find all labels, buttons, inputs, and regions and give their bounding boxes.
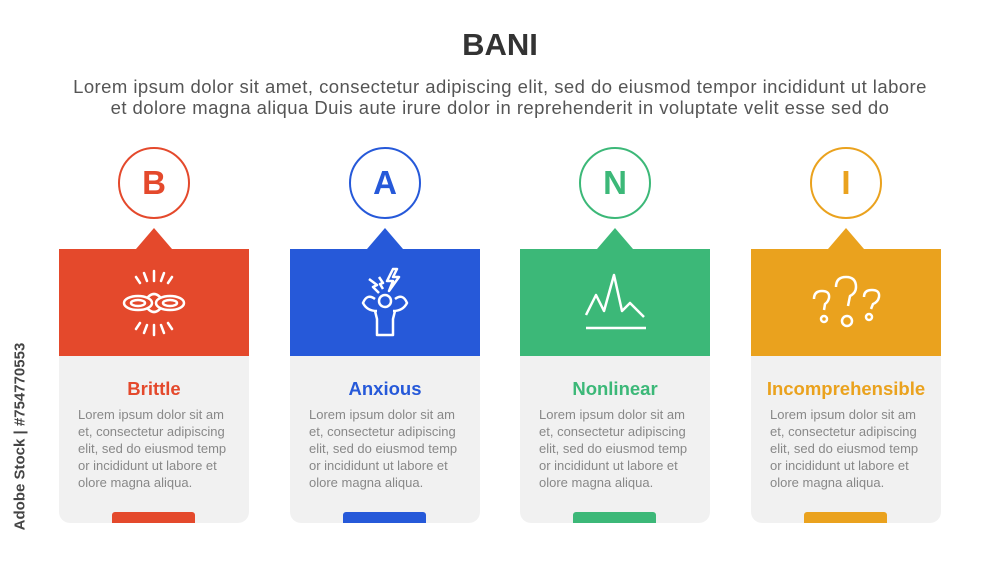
pointer [136,228,172,249]
text [309,407,457,490]
panel: nonlinear [520,147,710,523]
text: et, consectetur adipiscing [770,424,917,439]
text: olore magna aliqua. [770,475,884,490]
colored box with icon: question marks [751,249,941,356]
text: et, consectetur adipiscing [78,424,225,439]
body [59,356,249,523]
text: or incididunt ut labore et [309,458,448,473]
text: or incididunt ut labore et [539,458,678,473]
text: or incididunt ut labore et [770,458,909,473]
subtitle: et dolore magna aliqua Duis aute irure dolor in reprehenderit in voluptate velit esse sed do [111,97,889,118]
bottom bar [804,512,887,523]
letter circle I: I [841,164,851,201]
colored box with icon: chart line [520,249,710,356]
text: or incididunt ut labore et [78,458,217,473]
pointer [597,228,633,249]
colored box with icon: stressed person [290,249,480,356]
body [751,356,941,523]
heading: Brittle [127,378,181,399]
panel: brittle [59,147,249,523]
colored box with icon: broken chain [59,249,249,356]
text: et, consectetur adipiscing [539,424,686,439]
bottom bar [343,512,426,523]
text [78,407,226,490]
letter circle N: N [603,164,627,201]
panel: incomprehensible [751,147,941,523]
text: Lorem ipsum dolor sit am [539,407,685,422]
bottom bar [112,512,195,523]
letter circle A [349,147,421,219]
letter circle N [579,147,651,219]
subtitle: Lorem ipsum dolor sit amet, consectetur adipiscing elit, sed do eiusmod tempor incididunt ut labore [73,76,927,97]
letter circle B [118,147,190,219]
text: olore magna aliqua. [539,475,653,490]
body [290,356,480,523]
pointer [828,228,864,249]
text [770,407,918,490]
watermark text: Adobe Stock | #754770553 [12,343,28,530]
text: Lorem ipsum dolor sit am [770,407,916,422]
letter circle A: A [373,164,397,201]
pointer [367,228,403,249]
subtitle [73,76,927,118]
body [520,356,710,523]
text: Lorem ipsum dolor sit am [309,407,455,422]
text: elit, sed do eiusmod temp [78,441,226,456]
text: Lorem ipsum dolor sit am [78,407,224,422]
heading: Anxious [348,378,421,399]
text: elit, sed do eiusmod temp [309,441,457,456]
bottom bar [573,512,656,523]
text: olore magna aliqua. [309,475,423,490]
text: elit, sed do eiusmod temp [770,441,918,456]
text [539,407,687,490]
panel: anxious [290,147,480,523]
heading: Nonlinear [572,378,658,399]
text: elit, sed do eiusmod temp [539,441,687,456]
title: BANI [462,27,538,62]
text: olore magna aliqua. [78,475,192,490]
letter circle B: B [142,164,166,201]
letter circle I [810,147,882,219]
text: et, consectetur adipiscing [309,424,456,439]
heading: Incomprehensible [767,378,925,399]
